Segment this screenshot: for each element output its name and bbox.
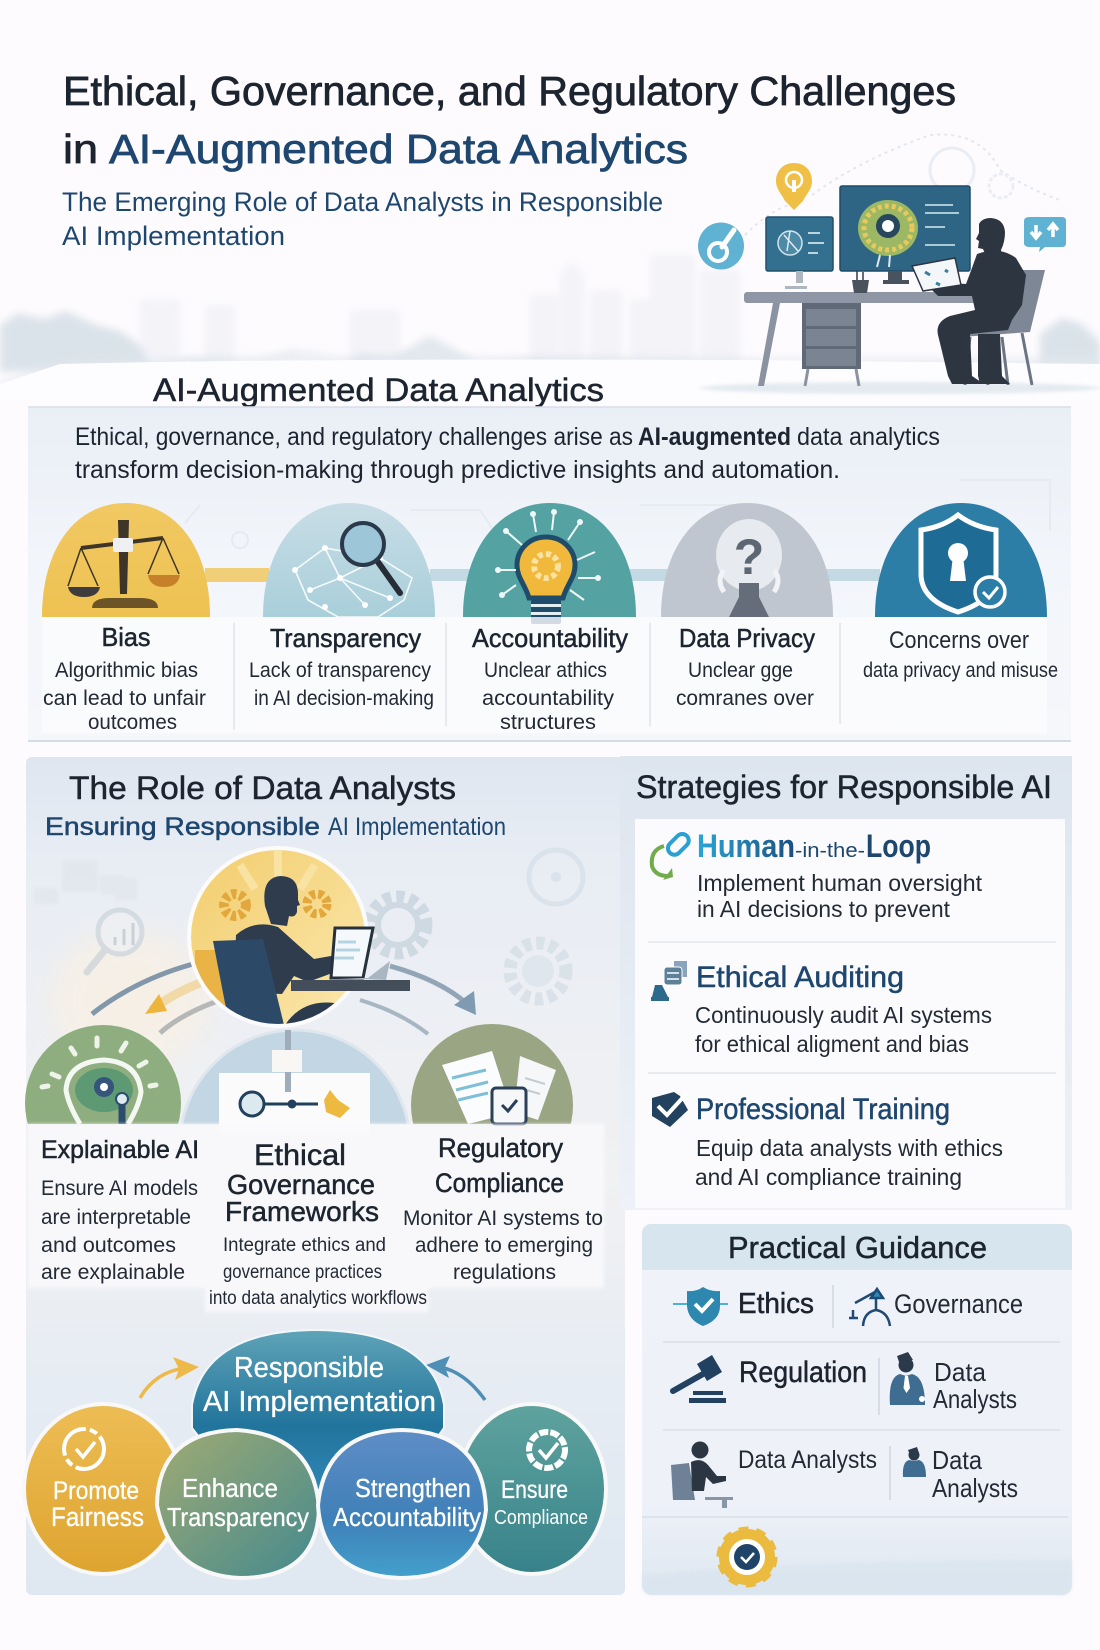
card: concerns: Concerns over: [889, 627, 1029, 654]
guidance row: ethics and governance: Ethics: [738, 1288, 814, 1320]
circle: ensure compliance: [458, 1404, 606, 1574]
title: AI-Augmented Data Analytics: [109, 126, 688, 172]
panel: strategies for responsible AI: [620, 756, 1072, 1210]
hero illustration: analyst at desk: [698, 134, 1066, 386]
icon: speech bubble: [1024, 217, 1066, 252]
arrow: yellow to implementation: [140, 1357, 199, 1398]
intro text: AI-augmented: [638, 423, 791, 451]
icon: audit stack: [651, 961, 687, 1001]
card: data privacy: [676, 623, 815, 710]
card: transparency: Transparency: [270, 623, 421, 653]
title: Ethical, Governance, and Regulatory Challenges: [63, 68, 956, 114]
guidance row: regulation and data analysts: Analysts: [933, 1384, 1017, 1414]
card: bias: [43, 622, 206, 734]
guidance row: data analysts: Analysts: [932, 1473, 1018, 1503]
guidance row: ethics and governance: [673, 1287, 1023, 1326]
text: ethical governance frameworks: Governance: [227, 1169, 375, 1200]
card: concerns: [863, 627, 1058, 682]
panel: AI-augmented analytics challenges: [28, 407, 1071, 741]
icon: central analyst circle: [187, 846, 410, 1035]
icon: transparency magnifier: [263, 503, 435, 617]
icon: regulatory documents dome: [411, 1024, 573, 1126]
card: transparency: [249, 623, 434, 710]
text: ethical governance frameworks: into data analytics workflows: [209, 1288, 427, 1309]
card: bias: Algorithmic bias: [55, 659, 198, 682]
circle: ensure compliance: Ensure: [501, 1476, 568, 1504]
circle: promote fairness: [24, 1404, 182, 1574]
icon: lightbulb: [776, 163, 812, 210]
connector band: [205, 568, 880, 582]
icon: compliance gear: [720, 1530, 774, 1584]
guidance row: regulation and data analysts: Data: [934, 1357, 987, 1387]
guidance row: regulation and data analysts: [673, 1352, 1017, 1414]
text: ethical governance frameworks: Ethical: [254, 1139, 346, 1172]
small monitor: [766, 217, 833, 289]
circle: enhance transparency: Enhance: [182, 1473, 278, 1503]
text: explainable AI: are explainable: [41, 1261, 185, 1284]
text: explainable AI: are interpretable: [41, 1206, 191, 1229]
text: regulatory compliance: Regulatory: [438, 1133, 563, 1163]
panel: practical guidance: [642, 1224, 1072, 1595]
card: transparency: Lack of transparency: [249, 659, 431, 682]
desk: [744, 271, 990, 386]
icon: ethical governance dome: [180, 1028, 410, 1124]
arrows from analyst: [92, 964, 476, 1034]
card: accountability: accountability: [482, 687, 615, 710]
icon: gavel: [673, 1355, 726, 1403]
icon: loop link: [652, 831, 691, 880]
decorative background gears and magnifier: [34, 850, 583, 999]
guidance row: regulation and data analysts: Regulation: [739, 1356, 867, 1389]
card: accountability: Unclear athics: [484, 659, 607, 682]
dome: responsible AI implementation: AI Implementation: [203, 1386, 436, 1418]
laptop: [912, 258, 961, 291]
card: accountability: Accountability: [472, 623, 628, 653]
heading: role of data analysts: The Role of Data Analysts: [69, 770, 456, 806]
strategy: human in the loop: Implement human oversight: [697, 870, 983, 896]
text: explainable AI: and outcomes: [41, 1234, 176, 1257]
subheading: ensuring responsible AI: Ensuring Responsible: [45, 813, 320, 841]
icon: privacy shield: [875, 503, 1047, 617]
card: bias: Bias: [102, 622, 150, 652]
text: regulatory compliance: adhere to emerging: [415, 1234, 593, 1257]
text: ethical governance frameworks: Integrate ethics and: [223, 1235, 386, 1256]
white caption card: [28, 1124, 604, 1312]
circle: enhance transparency: Transparency: [167, 1502, 309, 1532]
subheading: ensuring responsible AI: AI Implementation: [328, 813, 506, 841]
intro text: Ethical, governance, and regulatory challenges arise as: [75, 423, 633, 451]
icon: accountability lightbulb: [463, 503, 636, 624]
strategy: human in the loop: Loop: [866, 828, 931, 864]
hero city skyline background: [0, 258, 1100, 394]
icon: explainable AI dome: [25, 1025, 181, 1124]
icon: standing analyst: [903, 1447, 926, 1477]
intro text: [75, 423, 940, 484]
white caption strip: [42, 617, 1047, 733]
text: explainable AI: Explainable AI: [41, 1136, 199, 1164]
strategy: ethical auditing: for ethical aligment and bias: [695, 1031, 969, 1057]
strategy: human in the loop: in AI decisions to prevent: [697, 896, 951, 922]
dome: responsible AI implementation: Responsible: [234, 1352, 384, 1384]
subheading: ensuring responsible AI: [45, 813, 506, 841]
heading: practical guidance: Practical Guidance: [728, 1230, 987, 1265]
subtitle: [62, 187, 663, 251]
subtitle: The Emerging Role of Data Analysts in Responsible: [62, 187, 663, 217]
guidance row: data analysts: Data: [932, 1445, 982, 1475]
guidance row: data analysts: [671, 1442, 1018, 1508]
card: data privacy: Unclear gge: [688, 659, 793, 682]
heading: strategies: Strategies for Responsible AI: [636, 769, 1052, 805]
strategy: ethical auditing: Ethical Auditing: [696, 961, 904, 994]
strategy: human in the loop: -in-the-: [795, 840, 865, 862]
strategy: professional training: [652, 1092, 1003, 1190]
analyst silhouette: [930, 218, 1026, 384]
subtitle: AI Implementation: [62, 221, 285, 251]
text: ethical governance frameworks: Frameworks: [225, 1196, 379, 1227]
intro text: transform decision-making through predictive insights and automation.: [75, 456, 840, 484]
guidance row: ethics and governance: Governance: [894, 1289, 1023, 1319]
strategy: human in the loop: [652, 828, 983, 922]
text: ethical governance frameworks: [209, 1139, 427, 1309]
card: concerns: data privacy and misuse: [863, 659, 1058, 682]
circle: enhance transparency: [157, 1430, 319, 1578]
icon: blue analytics circle: [698, 222, 744, 270]
guidance row: data analysts: Data Analysts: [738, 1446, 877, 1474]
dome: responsible AI implementation: [192, 1330, 444, 1490]
strategy: professional training: Professional Training: [696, 1093, 950, 1126]
icon: data privacy question: [661, 503, 833, 617]
text: regulatory compliance: Monitor AI systems to: [403, 1207, 603, 1230]
title: in: [63, 126, 98, 172]
large monitor with brain: [840, 186, 970, 284]
intro text: data analytics: [797, 423, 940, 451]
circle: strengthen accountability: Strengthen: [355, 1473, 471, 1503]
text: regulatory compliance: [403, 1133, 603, 1284]
chair: [961, 270, 1045, 385]
card: bias: can lead to unfair: [43, 687, 206, 710]
strategy: ethical auditing: Continuously audit AI systems: [695, 1002, 992, 1028]
strategy: professional training: and AI compliance training: [695, 1164, 962, 1190]
text: regulatory compliance: Compliance: [435, 1168, 564, 1198]
card: bias: outcomes: [88, 711, 177, 734]
strategy: human in the loop: Human: [697, 828, 795, 864]
diagram: responsible AI implementation: [24, 1330, 606, 1578]
panel: role of data analysts: [24, 757, 625, 1595]
text: ethical governance frameworks: governance practices: [223, 1262, 382, 1283]
card: data privacy: comranes over: [676, 687, 814, 710]
title: [63, 68, 956, 172]
card: transparency: in AI decision-making: [254, 687, 434, 710]
circle: strengthen accountability: [318, 1430, 486, 1578]
icon: shield check: [652, 1092, 688, 1127]
text: regulatory compliance: regulations: [453, 1261, 556, 1284]
section heading: AI-Augmented Data Analytics: AI-Augmented Data Analytics: [153, 372, 604, 408]
circle: ensure compliance: Compliance: [494, 1507, 588, 1529]
icon: seated analyst: [671, 1442, 733, 1508]
circle: promote fairness: Promote: [53, 1477, 139, 1505]
arrow: blue to implementation: [426, 1356, 485, 1400]
card: data privacy: Data Privacy: [679, 623, 815, 653]
strategy: ethical auditing: [651, 961, 992, 1057]
card: accountability: [472, 623, 628, 734]
text: explainable AI: [41, 1136, 199, 1284]
icon: ethics shield: [673, 1287, 728, 1326]
circle: promote fairness: Fairness: [51, 1502, 144, 1532]
icon: data privacy question: ?: [734, 529, 764, 585]
icon: analyst person: [890, 1352, 925, 1405]
icon: bias scales: [42, 503, 210, 617]
strategy: professional training: Equip data analysts with ethics: [696, 1135, 1003, 1161]
icon: governance tree: [849, 1289, 890, 1326]
text: explainable AI: Ensure AI models: [41, 1177, 198, 1200]
circle: strengthen accountability: Accountability: [333, 1502, 481, 1532]
card: accountability: structures: [500, 711, 596, 734]
